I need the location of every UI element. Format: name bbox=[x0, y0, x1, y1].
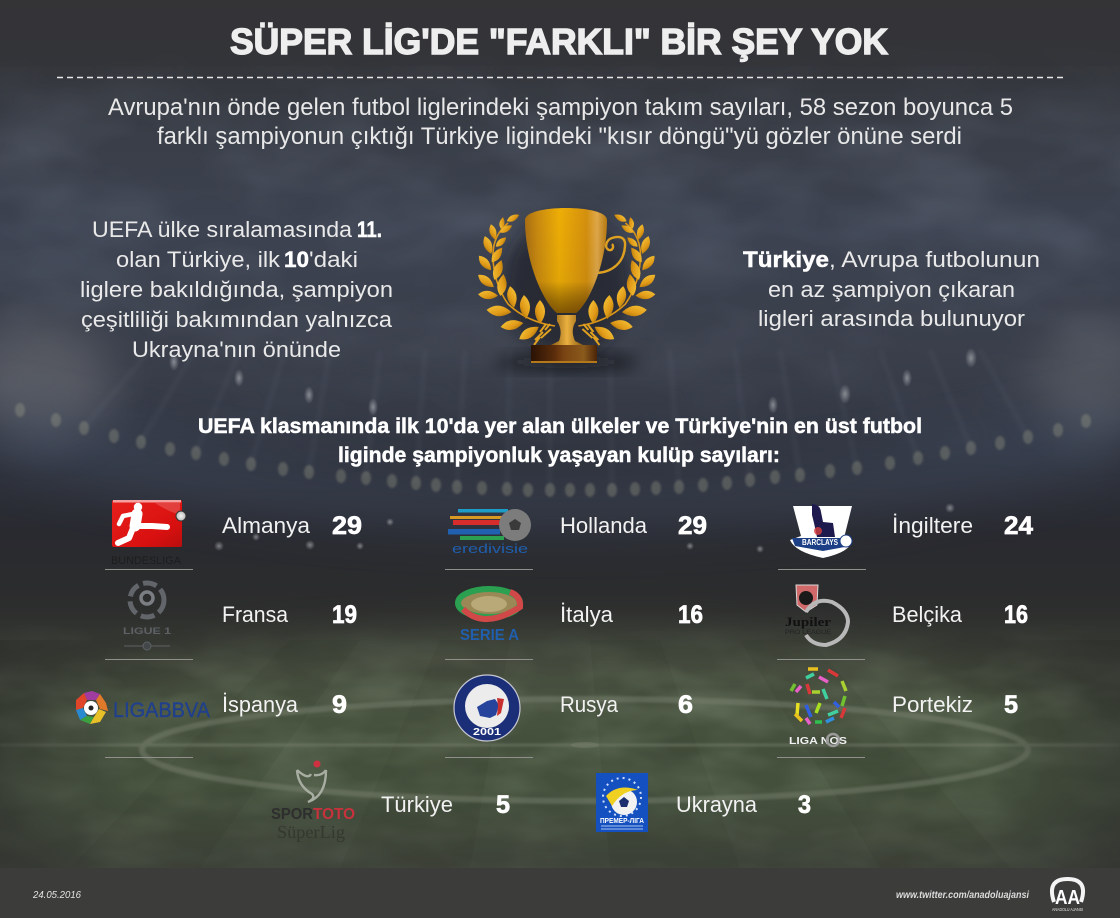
entry: Portekiz 5: 5 bbox=[1004, 691, 1018, 719]
subtitle bbox=[108, 94, 1013, 150]
logo: Liga NOS: LIGA NOS bbox=[789, 736, 847, 747]
title: SÜPER LİG'DE "FARKLI" BİR ŞEY YOK bbox=[230, 21, 888, 62]
logo: Premier League: BARCLAYS bbox=[802, 538, 839, 547]
right text block bbox=[743, 247, 1040, 331]
logo: Jupiler Pro League: Jupiler bbox=[785, 614, 831, 629]
left text block: 10 bbox=[284, 247, 309, 272]
logo: Liga BBVA: LIGABBVA bbox=[113, 699, 210, 722]
subtitle: Avrupa'nın önde gelen futbol liglerindeki şampiyon takım sayıları, 58 sezon boyunca 5 bbox=[108, 94, 1013, 121]
logo: Ukrainian Premier League: ПРЕМЕР-ЛІГА bbox=[600, 816, 645, 825]
icon: Anadolu Ajansı logo: AA bbox=[1055, 887, 1080, 909]
heading: league table: UEFA klasmanında ilk 10'da yer alan ülkeler ve Türkiye'nin en üst futbol bbox=[198, 415, 922, 438]
right text block: en az şampiyon çıkaran bbox=[768, 277, 1015, 302]
left text block: Ukrayna'nın önünde bbox=[132, 337, 341, 362]
entry: İspanya 9 bbox=[76, 691, 347, 724]
right text block: Türkiye bbox=[743, 247, 829, 272]
entry: Portekiz 5 bbox=[789, 669, 1018, 747]
entry: İngiltere 24 bbox=[790, 504, 1033, 558]
entry: Türkiye 5 bbox=[271, 760, 510, 842]
left text block: 11. bbox=[357, 217, 382, 242]
logo: Russian Premier League: 2001 bbox=[473, 727, 502, 738]
stadium light beams bbox=[84, 350, 1028, 490]
entry: Belçika 16 bbox=[785, 585, 1028, 645]
entry: İngiltere 24: İngiltere bbox=[892, 513, 973, 538]
logo: Eredivisie: eredivisie bbox=[452, 541, 528, 556]
subtitle: farklı şampiyonun çıktığı Türkiye ligindeki "kısır döngü"yü gözler önüne serdi bbox=[157, 123, 962, 150]
logo: Eredivisie bbox=[448, 509, 531, 556]
entry: Ukrayna 3: Ukrayna bbox=[676, 792, 758, 817]
logo: Ligue 1: LIGUE 1 bbox=[123, 626, 172, 637]
logo: Spor Toto Süper Lig: SPOR bbox=[271, 806, 313, 823]
logo: Bundesliga bbox=[111, 500, 186, 567]
right text block: ligleri arasında bulunuyor bbox=[758, 306, 1025, 331]
left text block: olan Türkiye, ilk bbox=[116, 247, 281, 272]
icon: Anadolu Ajansı logo bbox=[1052, 879, 1083, 912]
logo: Spor Toto Süper Lig bbox=[271, 760, 355, 842]
entry: İtalya 16: İtalya bbox=[560, 602, 614, 627]
left text block: liglere bakıldığında, şampiyon bbox=[80, 277, 393, 302]
entry: Türkiye 5: 5 bbox=[496, 791, 510, 819]
logo: Russian Premier League bbox=[454, 675, 520, 741]
logo: Jupiler Pro League: PRO LEAGUE bbox=[785, 630, 831, 636]
left text block bbox=[80, 217, 393, 362]
twitter address: www.twitter.com/anadoluajansi bbox=[896, 889, 1030, 901]
logo: Ligue 1 bbox=[123, 583, 172, 650]
entry: Türkiye 5: Türkiye bbox=[381, 792, 453, 817]
logo: Spor Toto Süper Lig: SüperLig bbox=[277, 822, 345, 842]
left text block: 'daki bbox=[309, 247, 358, 272]
stadium lights bbox=[15, 403, 1091, 497]
entry: Hollanda 29 bbox=[448, 509, 707, 556]
entry: İtalya 16 bbox=[458, 589, 703, 644]
logo: Serie A: SERIE A bbox=[460, 627, 519, 644]
entry: Almanya 29: Almanya bbox=[222, 513, 311, 538]
logo: Bundesliga: BUNDESLIGA bbox=[111, 555, 182, 567]
entry: Fransa 19 bbox=[123, 583, 357, 650]
entry: Rusya 6: 6 bbox=[678, 691, 693, 719]
logo: Ukrainian Premier League bbox=[596, 773, 648, 832]
entry: Hollanda 29: Hollanda bbox=[560, 513, 648, 538]
icon: golden trophy with laurel wreath bbox=[476, 208, 658, 369]
entry: İtalya 16: 16 bbox=[678, 601, 703, 629]
left text block: UEFA ülke sıralamasında bbox=[92, 217, 353, 242]
logo: Jupiler Pro League bbox=[785, 585, 848, 645]
football pitch bbox=[0, 620, 1120, 870]
sparkles bbox=[169, 348, 977, 553]
icon: Anadolu Ajansı logo: ANADOLU AJANSI bbox=[1052, 907, 1083, 912]
left text block: çeşitliliği bakımından yalnızca bbox=[81, 307, 393, 332]
entry: Hollanda 29: 29 bbox=[678, 512, 707, 540]
entry: Belçika 16: 16 bbox=[1004, 601, 1028, 629]
entry: Belçika 16: Belçika bbox=[892, 602, 963, 627]
logo: Liga BBVA bbox=[76, 691, 210, 724]
logo: Premier League bbox=[790, 504, 852, 558]
entry: Fransa 19: Fransa bbox=[222, 602, 289, 627]
entry: Almanya 29 bbox=[111, 500, 362, 567]
entry: Ukrayna 3 bbox=[596, 773, 811, 832]
entry: Almanya 29: 29 bbox=[332, 512, 362, 540]
heading: league table bbox=[198, 415, 922, 467]
logo: Liga NOS bbox=[789, 669, 847, 747]
entry: Ukrayna 3: 3 bbox=[798, 791, 811, 819]
entry: Portekiz 5: Portekiz bbox=[892, 692, 973, 717]
entry: Fransa 19: 19 bbox=[332, 601, 357, 629]
logo: Serie A bbox=[458, 589, 520, 644]
entry: Rusya 6 bbox=[454, 675, 693, 741]
logo: Spor Toto Süper Lig: TOTO bbox=[313, 806, 355, 823]
entry: Rusya 6: Rusya bbox=[560, 692, 619, 717]
entry: İspanya 9: İspanya bbox=[222, 692, 299, 717]
entry: İngiltere 24: 24 bbox=[1004, 512, 1033, 540]
heading: league table: liginde şampiyonluk yaşayan kulüp sayıları: bbox=[338, 444, 780, 467]
right text block: , Avrupa futbolunun bbox=[829, 247, 1040, 272]
entry: İspanya 9: 9 bbox=[332, 691, 347, 719]
date: 24.05.2016 bbox=[32, 889, 81, 901]
